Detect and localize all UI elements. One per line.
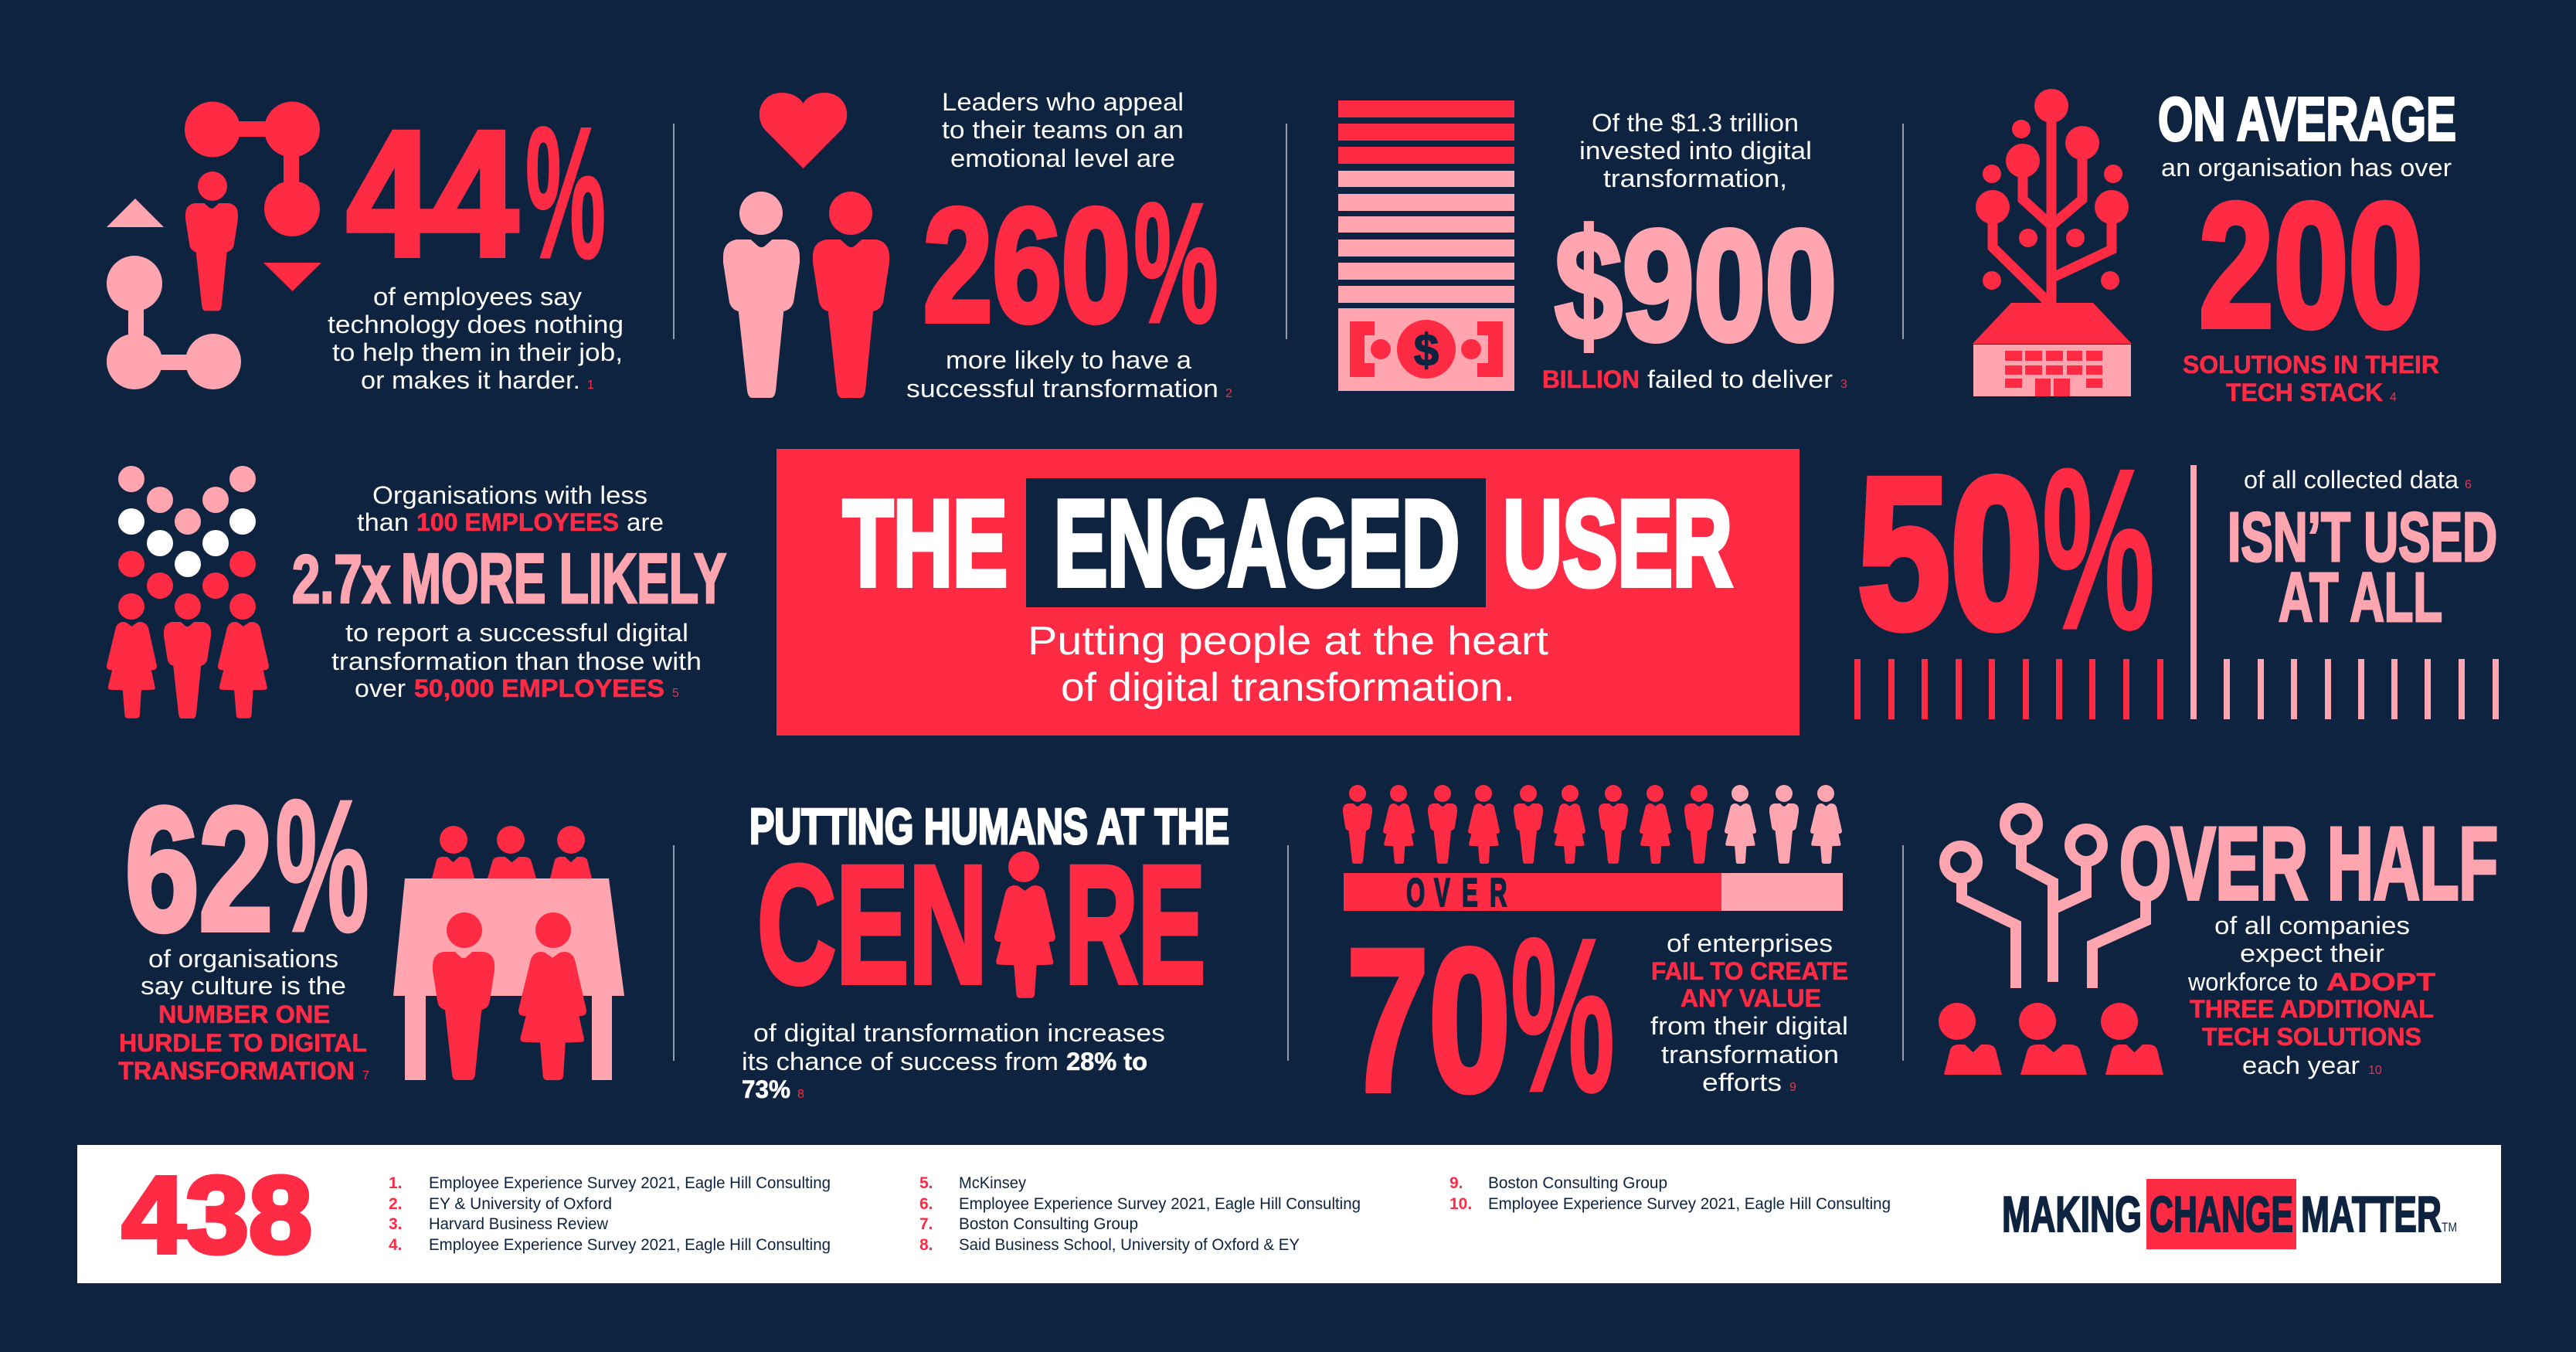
text: organisations with less than 100 employees: are [627, 508, 664, 536]
text: employees say technology does nothing: 1 [587, 379, 594, 392]
references column two: Said Business School, University of Oxford & EY [959, 1236, 1300, 1254]
stat: 44%: 44 [347, 94, 518, 293]
text: enterprises fail to create value: from their digital [1650, 1012, 1848, 1040]
text: culture is the number one hurdle: TRANSFORMATION [118, 1057, 355, 1085]
panel: 44 percent technology stat [107, 89, 624, 394]
text: leaders who appeal [942, 88, 1184, 172]
text: chance of success: 8 [797, 1088, 804, 1101]
text: leaders who appeal: Leaders who appeal [942, 88, 1184, 116]
text: expect workforce to adopt solutions: THREE ADDITIONAL [2190, 995, 2434, 1023]
references column three: Employee Experience Survey 2021, Eagle Hill Consulting [1488, 1195, 1891, 1213]
panel: 50 percent of data unused [1854, 421, 2499, 719]
text: expect workforce to adopt solutions: expect their [2240, 939, 2384, 967]
text: of all collected data: of all collected data [2244, 466, 2459, 494]
text: billion failed to deliver [1542, 365, 1847, 393]
text: leaders who appeal: emotional level are [950, 144, 1175, 172]
stat: 200: 200 [2199, 168, 2423, 364]
text: chance of success [742, 1019, 1165, 1103]
title: the engaged user: THE [843, 476, 1008, 612]
references column two: McKinsey [959, 1174, 1026, 1192]
text: of the 1.3 trillion invested: invested into digital [1579, 137, 1812, 165]
references column one: Employee Experience Survey 2021, Eagle Hill Consulting [429, 1236, 831, 1254]
references column one: 4. [389, 1236, 403, 1254]
stat: 70%: 70 [1347, 907, 1511, 1133]
text: organisations with less than 100 employees: 100 EMPLOYEES [416, 508, 619, 536]
references column three: Boston Consulting Group [1488, 1174, 1667, 1192]
text: solutions in their tech stack: SOLUTIONS IN THEIR [2183, 351, 2439, 379]
heading: putting humans at the: PUTTING HUMANS AT THE [749, 798, 1229, 854]
text: chance of success: of digital transformation increases [753, 1019, 1165, 1047]
panel: 62 percent culture hurdle [118, 760, 624, 1085]
text: expect workforce to adopt solutions: ADOPT [2326, 968, 2436, 996]
text: solutions in their tech stack: 4 [2390, 391, 2397, 404]
references column three: 10. [1449, 1195, 1472, 1213]
stat: 2.7x more likely: MORE LIKELY [401, 540, 726, 618]
references column one: Employee Experience Survey 2021, Eagle Hill Consulting [429, 1174, 831, 1192]
text: culture is the number one hurdle: HURDLE TO DIGITAL [119, 1029, 367, 1057]
references column one: 3. [389, 1215, 403, 1233]
panel: putting humans at the centre [742, 798, 1229, 1103]
stat: 2.7x more likely: 2.7x [292, 541, 390, 617]
references column two: 7. [919, 1215, 933, 1233]
stat: $900: 900 [1623, 198, 1837, 372]
icon: tree growing from building [1973, 89, 2132, 396]
text: expect workforce to adopt solutions: of all companies [2214, 912, 2410, 939]
text: to report a successful digital transformation: over [355, 674, 406, 702]
panel: main title [777, 449, 1799, 735]
references column two: 8. [919, 1236, 933, 1254]
stat: 62%: % [275, 760, 369, 971]
icon: row of twelve people [1343, 785, 1842, 864]
text: of all collected data: 6 [2465, 478, 2472, 491]
text: enterprises fail to create value: of enterprises [1667, 929, 1833, 957]
references column one: EY & University of Oxford [429, 1195, 612, 1213]
text: enterprises fail to create value: FAIL TO CREATE [1651, 957, 1848, 985]
text: to report a successful digital transformation: 5 [672, 687, 679, 700]
icon: dots falling on three people [107, 466, 269, 718]
stat: 50%: % [2042, 421, 2155, 677]
references column three [1449, 1174, 1891, 1213]
panel: 2.7x more likely [107, 466, 726, 718]
stat: $900: $ [1555, 198, 1623, 372]
stat: 50%: 50 [1857, 433, 2043, 673]
text: solutions in their tech stack: TECH STACK [2226, 379, 2383, 406]
title: the engaged user: USER [1503, 476, 1732, 612]
text: more likely to have a successful transformation [906, 346, 1232, 403]
icon: stack of banknotes: $ [1414, 325, 1439, 375]
text: an organisation has over: an organisation has over [2161, 154, 2452, 182]
text: enterprises fail to create value: efforts [1702, 1068, 1782, 1096]
text: enterprises fail to create value: transformation [1661, 1041, 1839, 1068]
text: expect workforce to adopt solutions: workforce to [2187, 968, 2318, 996]
text: culture is the number one hurdle: say culture is the [141, 972, 346, 1000]
text: billion failed to deliver: failed to deliver [1647, 365, 1833, 393]
text: employees say technology does nothing [328, 283, 624, 394]
heading: centre with person as letter T: RE [1065, 831, 1205, 1018]
panel: 44 percent technology stat: % [525, 89, 606, 297]
heading: over half: OVER [2119, 807, 2308, 921]
references column one: 2. [389, 1195, 403, 1213]
panel: footer [77, 1145, 2501, 1283]
text: of the 1.3 trillion invested: Of the $1.3 trillion [1592, 109, 1799, 137]
text: to report a successful digital transformation: transformation than those with [331, 647, 702, 675]
references column three: 9. [1449, 1174, 1463, 1192]
icon: people around a table [393, 826, 624, 1080]
references column two: Boston Consulting Group [959, 1215, 1138, 1233]
text: more likely to have a successful transformation: more likely to have a [946, 346, 1191, 374]
logo: making change matter: MATTER [2301, 1186, 2442, 1242]
text: billion failed to deliver: 3 [1840, 378, 1847, 391]
text: employees say technology does nothing: of employees say [373, 283, 582, 311]
references column two: 6. [919, 1195, 933, 1213]
stat: 260%: % [1133, 168, 1218, 359]
text: of the 1.3 trillion invested: transformation, [1603, 165, 1787, 192]
text: to report a successful digital transformation [331, 619, 702, 702]
title highlight box [1026, 478, 1486, 607]
subtitle [1028, 619, 1549, 710]
text: expect workforce to adopt solutions: 10 [2368, 1064, 2382, 1077]
references column two: Employee Experience Survey 2021, Eagle Hill Consulting [959, 1195, 1361, 1213]
references column one: 1. [389, 1174, 403, 1192]
title: the engaged user [843, 476, 1732, 612]
references column two [919, 1174, 1361, 1254]
text: to report a successful digital transformation: 50,000 EMPLOYEES [414, 674, 664, 702]
logo: making change matter: CHANGE [2149, 1186, 2293, 1242]
heading: on average: ON AVERAGE [2158, 85, 2456, 153]
references column one: Harvard Business Review [429, 1215, 609, 1233]
text: culture is the number one hurdle: 7 [362, 1069, 369, 1082]
text: more likely to have a successful transformation: successful transformation [906, 375, 1218, 403]
references column two: 5. [919, 1174, 933, 1192]
text: to report a successful digital transformation: to report a successful digital [345, 619, 688, 647]
text: enterprises fail to create value [1650, 929, 1848, 1096]
text: employees say technology does nothing: technology does nothing [328, 311, 624, 338]
text: organisations with less than 100 employees: Organisations with less [372, 481, 647, 509]
stat: 260%: 260 [923, 176, 1130, 355]
heading: centre with person as letter T: CEN [757, 831, 987, 1018]
divider bar [2190, 465, 2197, 719]
text: employees say technology does nothing: or makes it harder. [361, 366, 580, 394]
stat: $900 [1555, 198, 1837, 372]
text: employees say technology does nothing: to help them in their job, [332, 338, 623, 366]
panel: over half adopt solutions [1939, 807, 2498, 1079]
panel: 900 billion failed to deliver [1338, 100, 1847, 393]
text: chance of success: 28% to [1066, 1048, 1147, 1075]
text: expect workforce to adopt solutions: each year [2242, 1051, 2360, 1079]
icon: linked dots with person and arrows [107, 102, 321, 389]
chart: progress bar [1344, 873, 1843, 911]
text: expect workforce to adopt solutions: TECH SOLUTIONS [2202, 1023, 2421, 1051]
title: the engaged user: ENGAGED [1054, 476, 1460, 612]
panel: 200 solutions in tech stack [1973, 85, 2456, 406]
logo: making change matter: TM [2442, 1220, 2457, 1235]
icon: heart and two people [723, 93, 889, 398]
heading: isn't used at all: AT ALL [2279, 559, 2442, 637]
subtitle: Putting people at the heart [1028, 619, 1549, 664]
text: solutions in their tech stack [2183, 351, 2439, 406]
label: over: OVER [1406, 871, 1507, 915]
icon: stack of banknotes [1338, 100, 1514, 391]
text: organisations with less than 100 employees: than [357, 508, 409, 536]
text: organisations with less than 100 employees [357, 481, 664, 536]
logo: making change matter [2002, 1179, 2457, 1249]
stat: 2.7x more likely [292, 540, 726, 618]
text: expect workforce to adopt solutions [2187, 912, 2436, 1079]
text: culture is the number one hurdle: NUMBER ONE [158, 1000, 330, 1028]
logo: 438: 438 [122, 1153, 312, 1276]
chart: tick marks half red half pink [1854, 659, 2499, 719]
text: chance of success: its chance of success from [742, 1048, 1059, 1075]
subtitle: of digital transformation. [1061, 665, 1515, 710]
logo: making change matter: MAKING [2002, 1186, 2142, 1242]
icon: circuit lines with people [1939, 808, 2163, 1075]
panel: over 70 percent fail [1343, 785, 1848, 1138]
text: of the 1.3 trillion invested [1579, 109, 1812, 192]
text: enterprises fail to create value: 9 [1789, 1081, 1796, 1094]
references column one [389, 1174, 831, 1254]
text: culture is the number one hurdle [118, 945, 369, 1085]
text: billion failed to deliver: BILLION [1542, 365, 1640, 393]
stat: 62%: 62 [125, 771, 273, 966]
text: more likely to have a successful transformation: 2 [1225, 387, 1232, 400]
stat: 70%: % [1511, 893, 1615, 1138]
text: enterprises fail to create value: ANY VALUE [1681, 984, 1821, 1012]
heading: isn't used at all [2228, 499, 2497, 637]
text: culture is the number one hurdle: of organisations [148, 945, 338, 973]
text: chance of success: 73% [742, 1075, 790, 1103]
panel: 260 percent emotional leaders stat [723, 88, 1232, 403]
text: leaders who appeal: to their teams on an [942, 116, 1184, 144]
